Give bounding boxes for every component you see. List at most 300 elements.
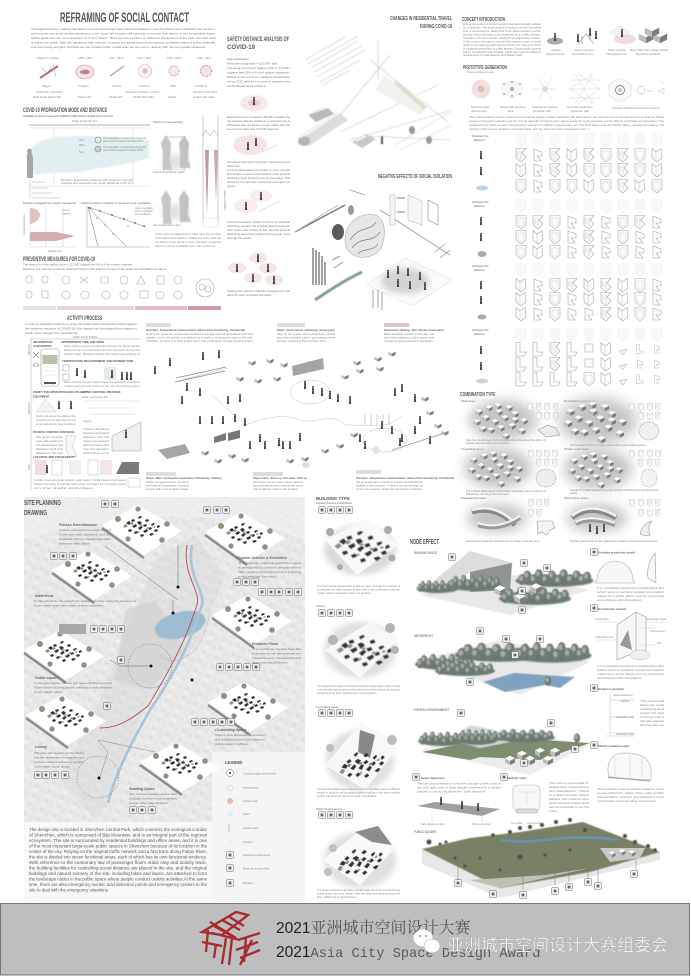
- airborne decay chart: No ventilation: [135, 212, 151, 216]
- site description text: buildings and natural scenery of the site, including lakes and lawns, are attached to form: [29, 871, 207, 876]
- activity caption: reservation: Reservation ·Meeting ·Rest ·Private conversation: [384, 328, 444, 332]
- product: disinfection shower: [591, 605, 667, 680]
- product: mobile isolation cabin: This product can prevent patients from: [597, 787, 665, 791]
- combination panel: reading space: Reading/Education space: [564, 399, 596, 403]
- site description text: of Shenzhen, which is composed of Bija Mountain, and is an integral part of the regional: [29, 832, 207, 838]
- block: waterfront: In this stands by the waterfront, visitors can fully enjoy the pleasure to: [34, 599, 136, 603]
- activity caption: disinfection: During the epidemic, people are required to comply with social isolation and visit: [146, 332, 253, 336]
- block: library: Library: [35, 745, 48, 749]
- block: co-working: Co-working Space: [215, 728, 246, 732]
- note: space spectrum: Space Spectrum: [421, 776, 445, 780]
- block: library: [26, 657, 124, 778]
- safety text 3: Sprinkled scenario: Dynamic movement and: [227, 160, 290, 164]
- prototype diagrams: area: [508, 109, 514, 113]
- site description text: The design site is located in Shenzhen Central Park, which connects the ecological corridor: [29, 827, 208, 832]
- safety text 3: distancing circle formed by the six-foot radius. This: [227, 176, 290, 180]
- activity process panel: TEMPERATURE MEASUREMENT AND DISINFECTION: [62, 359, 133, 363]
- activity process panel: EQUIPMENT: [33, 394, 50, 398]
- block: entrance plaza: dispensing medical devices.: [252, 660, 288, 664]
- activity process panel: Visitors will adopt: [83, 427, 109, 431]
- activity process panel: [27, 339, 141, 490]
- concept icons: Social distancing: [574, 48, 594, 52]
- prototype diagrams: prevention path: [571, 109, 589, 113]
- safety text 2: area of a 6-foot radius circle of 113.097 square feet.: [227, 127, 279, 131]
- droplet height bars: Range of droplets: [223, 190, 227, 211]
- node: waterfront: WATERFRONT: [414, 633, 433, 638]
- distance rings cluster: [228, 252, 283, 286]
- combination panel: shell space: Shell space: [461, 399, 476, 403]
- legend: Crossing a plan-arrived point: [243, 772, 276, 776]
- building type: co-working: public transport at the work style of activities.: [317, 794, 377, 798]
- product: distance reminder: detect your social: [640, 703, 664, 707]
- block: reading space: [129, 742, 220, 813]
- droplet cloud chart: 25cm: [79, 143, 85, 147]
- heading: safety distance: [227, 36, 289, 51]
- building type: public square: Public Square Forest: [316, 807, 342, 811]
- combination panel: shell space: [461, 399, 560, 445]
- safety text 3: [227, 160, 290, 188]
- heading: prototype generation: PROTOTYPE GENERATION: [463, 65, 507, 71]
- activity process panel: END: [27, 464, 31, 470]
- block: popular science: educational function.: [238, 574, 278, 578]
- virus timeline: Influenza: [139, 84, 150, 88]
- legend: Healthy track: [243, 826, 259, 830]
- block: public space: Public square: [35, 676, 59, 680]
- shield grid: group 3: Standard Use: [472, 264, 489, 268]
- heading: residential travel: [390, 16, 452, 30]
- shield grid: group 2: [472, 200, 662, 259]
- heading: node effect: NODE EFFECT: [410, 539, 439, 546]
- heading: concept introduction: CONCEPT INTRODUCTION: [462, 17, 505, 23]
- concept text: will be sustainable and variable, which can meet the different: [463, 50, 541, 54]
- safety text 5: [227, 289, 290, 297]
- block: fitness entertainment: behavior take place.: [59, 542, 91, 546]
- building type: science: main hall's arrangement of circles.: [317, 591, 372, 595]
- legend: [225, 760, 276, 886]
- product: disinfection shower: Disinfection shower: [598, 607, 627, 611]
- building type: library: a comfortably reading space on the wall and a set that reduces the distance: [317, 688, 401, 692]
- safety text 5: allows for users movement and pause.: [227, 293, 272, 297]
- activity caption: snack: Snack- Meet- Hydroponic experiment- Planned-by- Delivery: [146, 476, 222, 480]
- virus timeline: Deaths:: [168, 95, 177, 99]
- legend: Activity track: [243, 799, 258, 803]
- preventive text: The area of a 6-foot radius circle is 113.097 square feet (ft²) a 6-foot radius required.: [23, 262, 133, 266]
- droplet distribution chart: [22, 201, 76, 253]
- prototype text: people's cross-space separation and the external wall of the hexagonal prism wall as well as the social connection and the different combination and generation of the: [469, 119, 665, 123]
- safety text 3: and mingles a space at the footprint of the physical: [227, 172, 290, 176]
- activity caption: water: Sign up for regular show screenings, shows: [277, 332, 336, 336]
- footer title chinese: 2021亚洲城市空间设计大赛: [276, 919, 470, 937]
- activity caption: shop online: Shop online ·Stock up ·Pre-order ·Pick up: [253, 476, 307, 480]
- concept icons: Isolation: [551, 48, 561, 52]
- virus timeline: Deaths:300: [78, 95, 92, 99]
- product: portable shield: Portable protective shield: [598, 550, 635, 554]
- activity process panel: according to the planning line and: [36, 418, 77, 422]
- combination panel: co-working: Co-working space: [461, 447, 484, 451]
- site description text: of the most important large-scale public spaces in Shenzhen because of its location in the: [29, 844, 208, 848]
- heading: building type: BUILDING TYPE: [316, 496, 350, 501]
- product: disinfection shower: Thermometer: [650, 629, 666, 633]
- virus timeline: Infections:186 million: [193, 90, 218, 94]
- building type: public square: the different activities.: [317, 895, 357, 899]
- activity caption: shop online: physical access then extend the items: [253, 484, 304, 488]
- intro text: is within our reach, fight the pandemic with science, improve the social and environmental conditions that led to the outbreak,: [31, 40, 216, 44]
- node: fitness environment: [414, 707, 590, 775]
- product: distance reminder: project the area: [639, 711, 665, 715]
- title: REFRAMING OF SOCIAL CONTACT: [60, 9, 189, 25]
- block: waterfront: Waterfront: [35, 594, 54, 598]
- note: medical robot: Medical robot: [507, 776, 528, 780]
- concept text: [463, 22, 542, 57]
- activity caption: distance: [356, 470, 454, 491]
- block: waterfront: touch there and have water related activities.: [34, 604, 104, 608]
- product: distance reminder: This product will: [640, 699, 665, 703]
- shield grid: group 3: Behavior: [474, 268, 485, 272]
- concept icons: Post-epidemic era: [572, 52, 593, 56]
- product: disinfection shower: It is a foldable translucent polyethylene film: [597, 664, 665, 668]
- virus timeline: Smallpox: [78, 84, 89, 88]
- prototype diagrams: prevention path: [533, 109, 551, 113]
- concept icons: Most public space usage potential: [630, 48, 668, 52]
- virus timeline: Deaths:4.08 million: [193, 95, 216, 99]
- droplet cloud chart: that which is approximately 87%: [103, 148, 144, 152]
- isolation diagram with brain: [295, 190, 452, 310]
- site description text: the landscape nodes in the public space where people conduct orderly activities.At the same: [29, 876, 208, 882]
- activity caption: water: Water· Performance ·Gathering ·Group party: [277, 328, 335, 332]
- combination panel: co-working: distance among the people.: [466, 492, 510, 496]
- block: reading space: outdoor environment activities: [129, 796, 178, 800]
- activity process panel: based on constrained: [83, 431, 110, 435]
- distance rings 1: [240, 95, 268, 111]
- block: public space: under shade so that people maintain a safe distance: [34, 686, 112, 690]
- heading: safety distance: COVID-19: [227, 44, 256, 51]
- node: waterfront: [414, 628, 592, 695]
- product: disinfection shower: Disinfection liquid: [646, 617, 667, 621]
- airborne decay chart: Airborne times in relation to the level of air ventilation: [81, 201, 151, 205]
- airborne decay chart: Poor ventilation: [135, 209, 153, 213]
- shield grid: group 1: Behavior: [474, 138, 485, 142]
- intro text: Throughout history, nothing has killed more human beings than infectious disease.Covid-19 shows how vulnerable we remain—: [31, 27, 216, 31]
- mask figures: after in a poorly ventilated room, the number of: [155, 244, 215, 248]
- block: reading space: The shared reading space with: [129, 792, 177, 796]
- activity process panel: measure and personal check in at 3m, tour the entrance region.: [64, 384, 140, 388]
- prototype diagrams: Selection of epidemic: [532, 105, 559, 109]
- activity caption: disinfection: [146, 323, 253, 343]
- product: portable shield: which aims to achieve spatial inoculation: [597, 590, 665, 594]
- droplet cloud chart: [27, 119, 150, 198]
- droplet distribution chart: Droplets instigated by coughs and speech: [23, 201, 76, 205]
- legend: Disinfection department: [243, 853, 271, 857]
- block: reading space: people who keep distance.: [129, 801, 169, 805]
- building type: science: The floor space pictured with a wide an open, through the function of: [317, 584, 400, 588]
- activity caption: reservation: [384, 323, 444, 343]
- intro text: and stop being arrogant. Perhaps we can behave better results than we are now in dealing with the next global pandemic.: [31, 45, 206, 49]
- preventive category bars: [23, 306, 221, 310]
- activity caption: shop online: will be directly send to the location.: [253, 487, 299, 491]
- legend: Entrance: [243, 881, 254, 885]
- activity process panel: and wall surface in: [36, 439, 64, 443]
- wechat icon: [414, 930, 440, 953]
- droplet height bars: [202, 115, 227, 227]
- shield grid: group 3: [472, 264, 662, 321]
- block: fitness entertainment: in the wild and dumbbell, and the: [59, 532, 111, 536]
- activity text: [25, 322, 137, 339]
- product: portable shield: measures in public places such as restaurants: [597, 594, 665, 598]
- prototype text: relationship are public people's corresponding need etc to is different social contact, etc. The three basic movement factors sitting, standing and walking. The: [469, 123, 665, 127]
- distance rings 2: [233, 135, 278, 155]
- activity process panel: on the trails activities.: [34, 486, 95, 490]
- block: popular science: The popular science exhibition area: [238, 561, 301, 565]
- product: distance reminder: Adjustable pole: [616, 715, 634, 719]
- activity process panel: APPOINTMENT TIME AND ZONE: [61, 340, 104, 344]
- node: reading space: READING SPACE: [414, 550, 437, 555]
- block: co-working: Visitors work alone with supervision: [215, 733, 265, 737]
- product: distance reminder: rarefying and: [640, 707, 665, 711]
- building type: public square: visitor space, and at a certain what can allow providing services are: [317, 892, 401, 896]
- activity process panel: develop more advanced: [83, 439, 110, 443]
- activity process panel: other, they will receive: [83, 447, 110, 451]
- activity caption: snack: and fruits and vegetables to provide: [146, 484, 190, 488]
- safety text: The area of a 6-foot radius circle is 113.097: [227, 66, 290, 70]
- prototype text: selection of the unit and conditions, and social needs, and vary above the most representative point...): [469, 127, 589, 131]
- activity process panel: Visitors will access the epidemic line: [36, 414, 77, 418]
- node: public square terrain: PUBLIC SQUARE: [414, 829, 436, 834]
- node: reading space: [414, 550, 594, 615]
- activity text: the epidemic situation in COVID-19, this design has formulated three stages of: [25, 326, 137, 330]
- activity process panel: The ground structure: [36, 435, 64, 439]
- activity caption: distance: to the emergency center for temporary isolation.: [356, 487, 423, 491]
- heading: site planning: DRAWING: [24, 508, 47, 517]
- activity process panel: INFORMATION: [33, 340, 53, 344]
- safety text 4: Limited scenario: Static in terms of physical: [227, 220, 290, 224]
- building type: public square: The space is pictured to provides a similar space the environmental thinking: [317, 888, 401, 892]
- mask figures: Effects of mask wearing: [153, 120, 183, 124]
- heading: preventive measures: PREVENTIVE MEASURES FOR COVID-19: [23, 256, 95, 263]
- activity process panel: distance between each: [83, 443, 110, 447]
- note: medical robot: Tray table: [511, 821, 523, 825]
- activity caption: distance: facilities at the entrance. If there is any abnormality, go: [356, 484, 424, 488]
- activity caption: snack: people with a lot of water intake.: [146, 487, 189, 491]
- note: medical robot: accommodate in to the: [549, 805, 590, 809]
- shield grid: group 2: Behavior: [474, 204, 485, 208]
- note: space spectrum: This product intends to use the change of the color of: [417, 782, 501, 786]
- combination panel: entertainment: Entertainment space: [461, 496, 487, 500]
- activity process panel: VERIFY THE OPERATION AND COLLECT: [33, 390, 88, 394]
- airborne decay chart: [81, 201, 154, 247]
- footer title english: 2021Asia City Space Design Award: [276, 944, 540, 962]
- note: medical robot: allows the visitors test: [549, 797, 589, 801]
- block: library: in the indoor social space.: [34, 764, 70, 768]
- block: fitness entertainment: facilities will be disinfected after: [59, 537, 111, 541]
- site description text: site to deal with the emergency situations.: [29, 888, 109, 892]
- safety text 4: [227, 220, 290, 240]
- building type: co-working: people to allow for use by several different people in the same position: [317, 790, 401, 794]
- concept icons: Beyond the epidemic: [636, 52, 661, 56]
- activity process panel: LOCATION AND TRACEABILITY: [33, 455, 76, 459]
- activity caption: shop online: All things you by store online without: [253, 480, 303, 484]
- combination panel: private social: eating.: [570, 491, 578, 495]
- product: disinfection shower: Control light: [595, 617, 609, 621]
- droplet cloud chart: The probability of transmitting at beyond: [103, 145, 147, 149]
- note: space spectrum: the LED light units to keep people movement in a certain: [417, 786, 502, 790]
- concept text: During the epidemic period, people have been socially isolated: [463, 22, 542, 26]
- building type: co-working: Co-working Space: [316, 705, 339, 709]
- droplet cloud chart: 35m: [79, 138, 84, 142]
- combination panel: shell space: See the continuous form of residents to improve the effect of: [466, 438, 546, 442]
- shield grid: group 4: Standard Use: [472, 328, 489, 332]
- safety text 5: Utilizing the optimum distance arrangement that: [227, 289, 290, 293]
- concept text: distance by placing public devices which can meet the needs: [463, 43, 542, 47]
- heading: propagation: COVID-19 PROPAGATION MODE AND DISTANCE: [23, 107, 107, 114]
- virus timeline: 1981—2010: [167, 56, 182, 60]
- shield grid: group 1: Standard Use: [472, 134, 489, 138]
- prototype text: [469, 115, 665, 131]
- product: portable shield: and workplaces after the epidemic.: [597, 598, 642, 602]
- activity caption: distance: Distance ·Temperature measurement ·Above-Fine monitoring ·Pestilential: [356, 476, 454, 480]
- note: space spectrum: spaces so as to visualize the "Safe distance".: [417, 790, 487, 794]
- mask figures: with surgical face mask: [153, 223, 181, 227]
- droplet distribution chart: Droplet size: [48, 249, 62, 253]
- concept icons: Epidemic period: [546, 52, 565, 56]
- combination panel: entertainment: Entertainment space for activities and for sitting in and play area.: [466, 539, 540, 543]
- block: fitness entertainment: Visitors can avoid physical contact: [59, 528, 111, 532]
- heading: negative effects: NEGATIVE EFFECTS OF SOCIAL ISOLATION: [378, 174, 452, 180]
- product: mobile isolation cabin: [591, 742, 665, 803]
- activity process panel: When entering the site, visitors should be arranged temperature: [64, 380, 141, 384]
- site description text: center of the city. Relying on the original traffic network and a fast track along Futian River,: [29, 849, 207, 854]
- combination panel: private social: [564, 447, 661, 495]
- shield grid: group 1: [472, 134, 662, 193]
- virus timeline: Deaths:500 million: [133, 95, 155, 99]
- virus timeline: [33, 56, 218, 99]
- shield grid: group 4: [472, 328, 662, 386]
- activity caption: disinfection: Disinfect· Temperature measurement ·Above-Fine monitoring ·Pestilential: [146, 328, 245, 332]
- virus timeline: Black Death Deaths:200: [33, 95, 62, 99]
- intro text: and how we can avoid similar pandemics in the future.We humans will continue to co-exist with germs. In the foreseeable future,: [31, 32, 216, 36]
- intro text: [31, 27, 216, 49]
- product: mobile isolation cabin: comfortable and quiet riding environment.: [597, 799, 657, 803]
- block: entrance plaza: Entrance Place: [252, 642, 278, 646]
- product: mobile isolation cabin: transportation, and can give patients a more: [597, 795, 665, 799]
- activity caption: reservation: needs to guaranteed in distance.: [384, 339, 434, 343]
- block: entrance plaza: The entrance square has the: [252, 647, 301, 651]
- virus timeline: Plague: [42, 84, 51, 88]
- safety text 4: through the space.: [227, 236, 252, 240]
- heading: site planning: SITE PLANNING: [24, 498, 61, 507]
- concept icons: Public physical: [608, 48, 626, 52]
- activity caption: water: and other activities held in open plazas while: [277, 336, 336, 340]
- activity process panel: location and activity through the mobile phone, and collect it on the phone's traces: [34, 482, 127, 486]
- note: medical robot: The robot is responsible for: [549, 781, 589, 785]
- virus timeline: 2019—2021: [197, 56, 212, 60]
- note: space spectrum: [413, 774, 502, 826]
- prototype diagrams: Grid and epidemic p: [567, 105, 594, 109]
- heading: safety distance: SAFETY DISTANCE ANALYSIS OF: [227, 36, 289, 43]
- site description text: time, there are also emergency nucleic acid detection points and emergency centers in the: [29, 882, 208, 887]
- product: distance reminder: Lighting: [620, 699, 630, 703]
- legend: Water: [243, 812, 250, 816]
- activity caption: shop online: [253, 472, 307, 491]
- activity process panel: before the trip, they will receive the time and zone of entry and: [64, 348, 141, 352]
- combination panel: reading space: [559, 398, 661, 447]
- combination panel: performance: [564, 496, 661, 543]
- node: fitness environment: FITNESS ENVIRONMENT: [414, 707, 449, 712]
- note: medical robot: is a thermometer which: [549, 793, 590, 797]
- virus timeline: Plague of Justinian: [37, 56, 59, 60]
- droplet distribution chart: Speech: [62, 212, 71, 216]
- block: public space: from each other.: [34, 690, 64, 694]
- block: library: current visitors will keep people: [34, 760, 84, 764]
- product: distance reminder: the area after use: [640, 723, 665, 727]
- concept text: kind of imprisonment. Meanwhile it can affect people's moods,: [463, 29, 541, 33]
- virus timeline: Infections:0.5 billion—1 billion: [125, 90, 160, 94]
- distance rings 3: [234, 190, 280, 213]
- note: space spectrum: Pressure sensor: [472, 822, 491, 826]
- safety text 3: A 6-foot-radius allows for people to move through: [227, 168, 290, 172]
- legend: Nursing point: [243, 786, 259, 790]
- safety text 3: allows for the dynamic movement of people in a: [227, 180, 290, 184]
- block: co-working: and compliant distance and access to: [215, 738, 265, 742]
- activity caption: snack: [146, 472, 222, 491]
- activity process panel: and follow on to: [83, 451, 110, 455]
- combination panel: co-working: [461, 447, 558, 496]
- activity caption: snack: Water an appointment; to pick it: [146, 480, 189, 484]
- activity caption: water: [277, 323, 336, 343]
- activity process panel: Staying: [83, 419, 92, 423]
- activity text: PARK TOUR STEPS: [73, 335, 97, 339]
- product: distance reminder: will also distract: [640, 719, 664, 723]
- droplet cloud chart: 5cm: [79, 150, 84, 154]
- activity process panel: ACQUISITION: [33, 344, 51, 348]
- airborne decay chart: Quiet ventilation: [135, 206, 154, 210]
- concept text: In this context, we hope to minimize the negative impact of social: [463, 40, 541, 44]
- safety text 2: 100square feet per person in open rather than the: [227, 123, 290, 127]
- safety text 2: transmission data for pandemic, a potential area of: [227, 119, 290, 123]
- block: popular science: Popular Science & Exhibition: [237, 556, 288, 560]
- footer band: [0, 904, 690, 975]
- product: mobile isolation cabin: Mobile isolation cabin: [598, 744, 630, 748]
- mask figures: of droplets and balloon. While the room with air: [155, 236, 221, 240]
- product: disinfection shower: measures in public places such as restaurants: [597, 672, 665, 676]
- block: fitness entertainment: [59, 501, 182, 558]
- block: fitness entertainment: Fitness Entertainment: [59, 523, 98, 527]
- concept text: Therefore, the environment needed is an adjustable position.: [463, 36, 541, 40]
- subheading: visibility: Visibility of virus in aerosols (SARS-CoV2) travels visible up to 2 hours: [23, 114, 113, 118]
- site description text: the building facilities for controlling social distance are placed in the site, and the original: [29, 866, 207, 870]
- product: mobile isolation cabin: cross-infection when they take public: [597, 791, 665, 795]
- droplet distribution chart: Cough: [62, 208, 70, 212]
- concept icons: [546, 24, 668, 56]
- safety text: square feet (ft²) a 6-foot radius squared).: [227, 70, 290, 74]
- virus timeline: COVID-19: [195, 84, 208, 88]
- combination panel: entertainment: [461, 496, 555, 543]
- block: entrance plaza: [212, 579, 301, 670]
- activity process panel: PROCESS: [27, 402, 31, 415]
- activity process panel: In order of relevant people contacts, public space, in public spaces (open spaces: [34, 478, 127, 482]
- safety text: Based on the common measure issued have: [227, 75, 290, 79]
- product: distance reminder: Distance reminder: [598, 687, 625, 691]
- product: distance reminder: [591, 685, 665, 736]
- virus timeline: 1855—1960: [78, 56, 93, 60]
- concept text: physical health will begin to be threatened by a sudden disease.: [463, 32, 541, 36]
- droplet cloud chart: The probability of transmitting at beyond: [103, 136, 147, 140]
- activity caption: water: before reaching the number limit.: [277, 339, 327, 343]
- droplet cloud chart: droplets and aerosols over depth dispersal of 50 to 3: [61, 181, 134, 185]
- safety text 3: space.: [227, 184, 236, 188]
- combination panel: performance: Performance space: [564, 496, 588, 500]
- virus timeline: AIDS: [170, 84, 176, 88]
- droplet distribution chart: Droplet emissions: [22, 214, 26, 235]
